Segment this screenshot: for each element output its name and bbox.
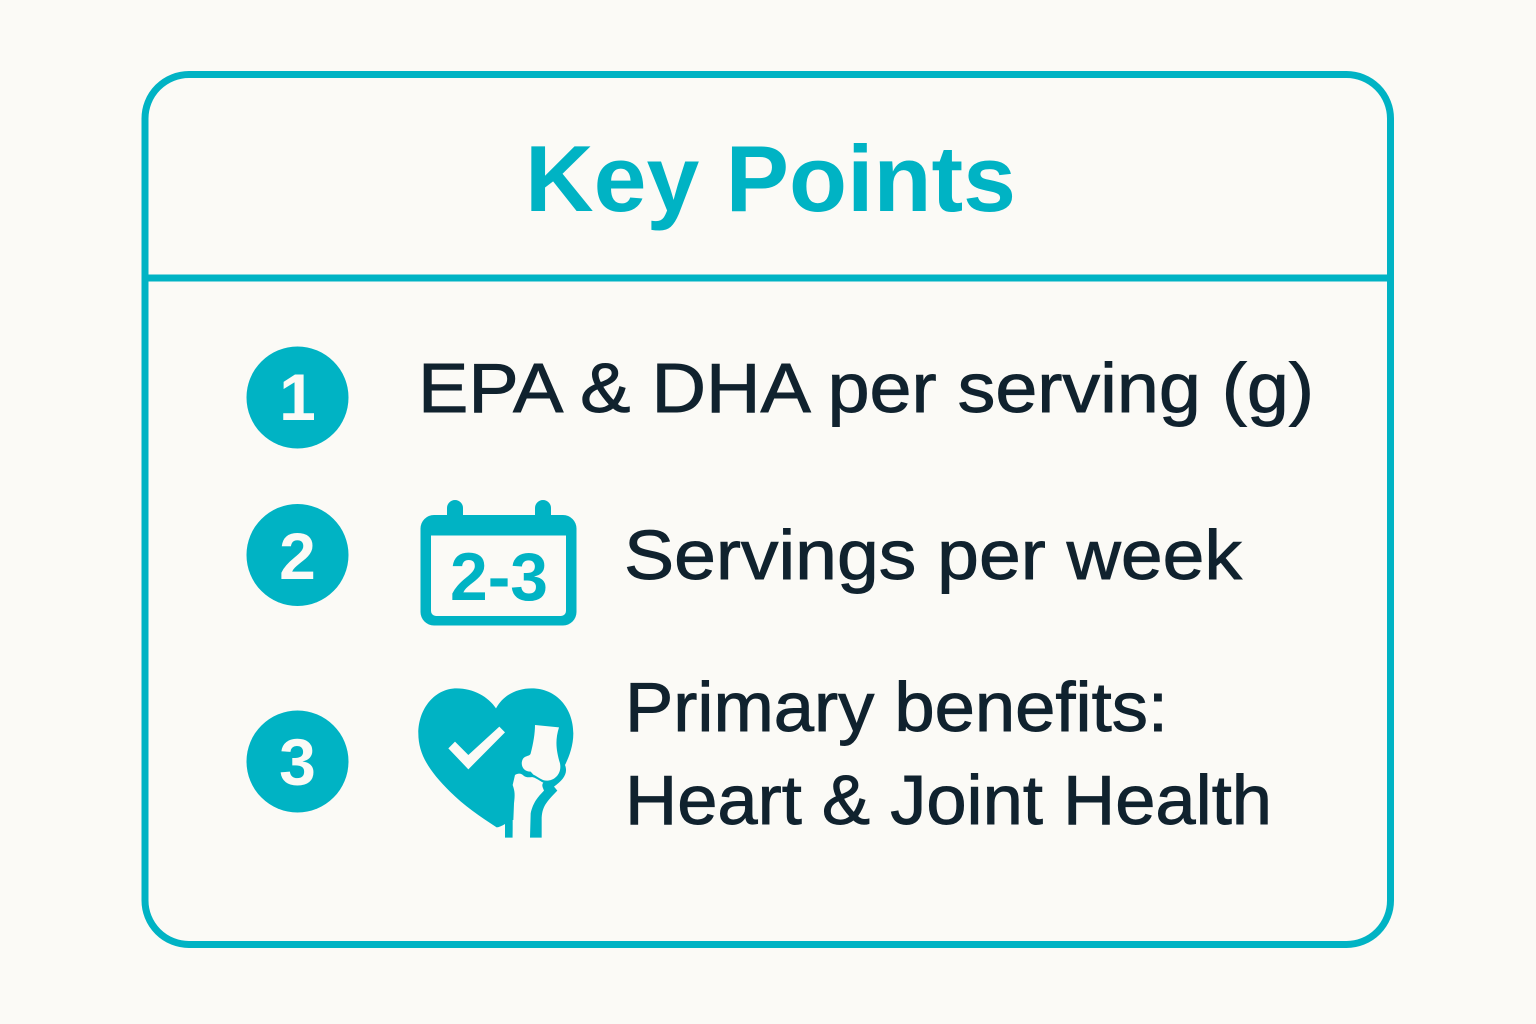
item 3: text: Heart & Joint Health <box>625 761 1272 839</box>
item 2: number badge <box>246 504 348 606</box>
title: Key Points <box>525 126 1016 231</box>
item 1: number badge <box>246 346 348 448</box>
panel: key points card <box>145 74 1390 944</box>
icon: calendar 2-3 <box>420 500 576 626</box>
item 3: number badge <box>246 710 348 812</box>
item 3: number badge: 3 <box>279 725 316 799</box>
item 3: text: Primary benefits: <box>625 668 1168 746</box>
icon: calendar 2-3: 2-3 <box>450 539 548 615</box>
item 2: text: Servings per week <box>624 516 1243 594</box>
icon: heart with check and knee joint <box>418 688 573 838</box>
item 1: text: EPA & DHA per serving (g) <box>418 349 1314 427</box>
item 1: number badge: 1 <box>279 360 316 434</box>
item 2: number badge: 2 <box>279 519 316 593</box>
item 3: text <box>625 668 1272 839</box>
